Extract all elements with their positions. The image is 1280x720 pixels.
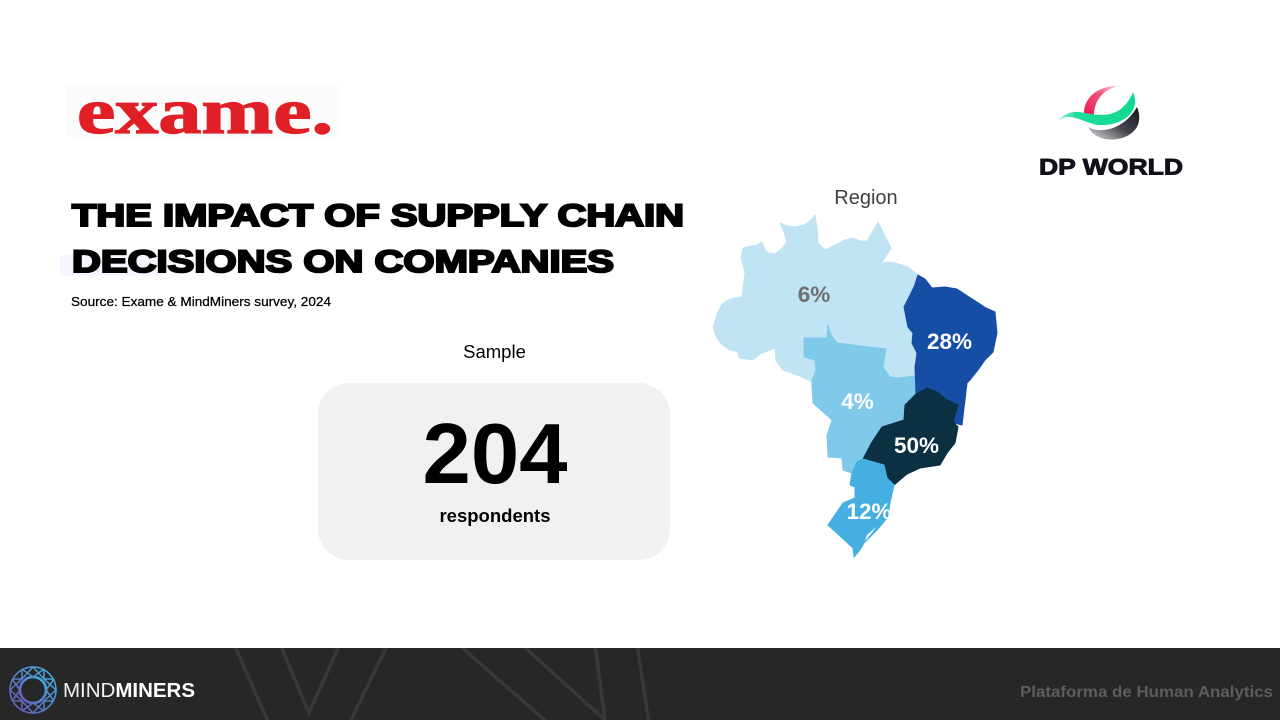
region: North [713,215,918,382]
region: South [828,459,894,557]
map: Brazil regions [713,215,997,557]
label: respondents: respondents [439,505,551,526]
panel: sample count [318,383,670,560]
source note: Source: Exame & MindMiners survey, 2024 [71,295,331,309]
region heading: Region [834,187,898,209]
title: DECISIONS ON COMPANIES [72,243,614,279]
wordmark: DP WORLD: DP WORLD [1039,154,1183,180]
region: Centre-West [804,325,916,473]
region: Northeast [904,275,997,425]
title [72,197,684,279]
icon: DP World globe swoosh [1057,86,1139,140]
label: North 6%: 6% [798,282,830,307]
logo: exame: exame. [77,76,333,148]
label: Centre-West 4%: 4% [841,389,874,414]
footer bar [0,644,1280,720]
title highlight patch [60,255,165,276]
title: THE IMPACT OF SUPPLY CHAIN [72,197,684,233]
wordmark: MindMiners: MINDMINERS [63,679,195,702]
number: respondents count: 204 [422,407,568,502]
logo: MindMiners gem [10,667,56,713]
region: Southeast [863,388,958,485]
tagline: Plataforma de Human Analytics [1020,684,1273,701]
label: Southeast 50%: 50% [894,433,939,458]
label: Northeast 28%: 28% [927,329,972,354]
sample heading: Sample [463,341,526,362]
logo: DP World [1039,86,1183,180]
label: South 12%: 12% [846,499,892,524]
